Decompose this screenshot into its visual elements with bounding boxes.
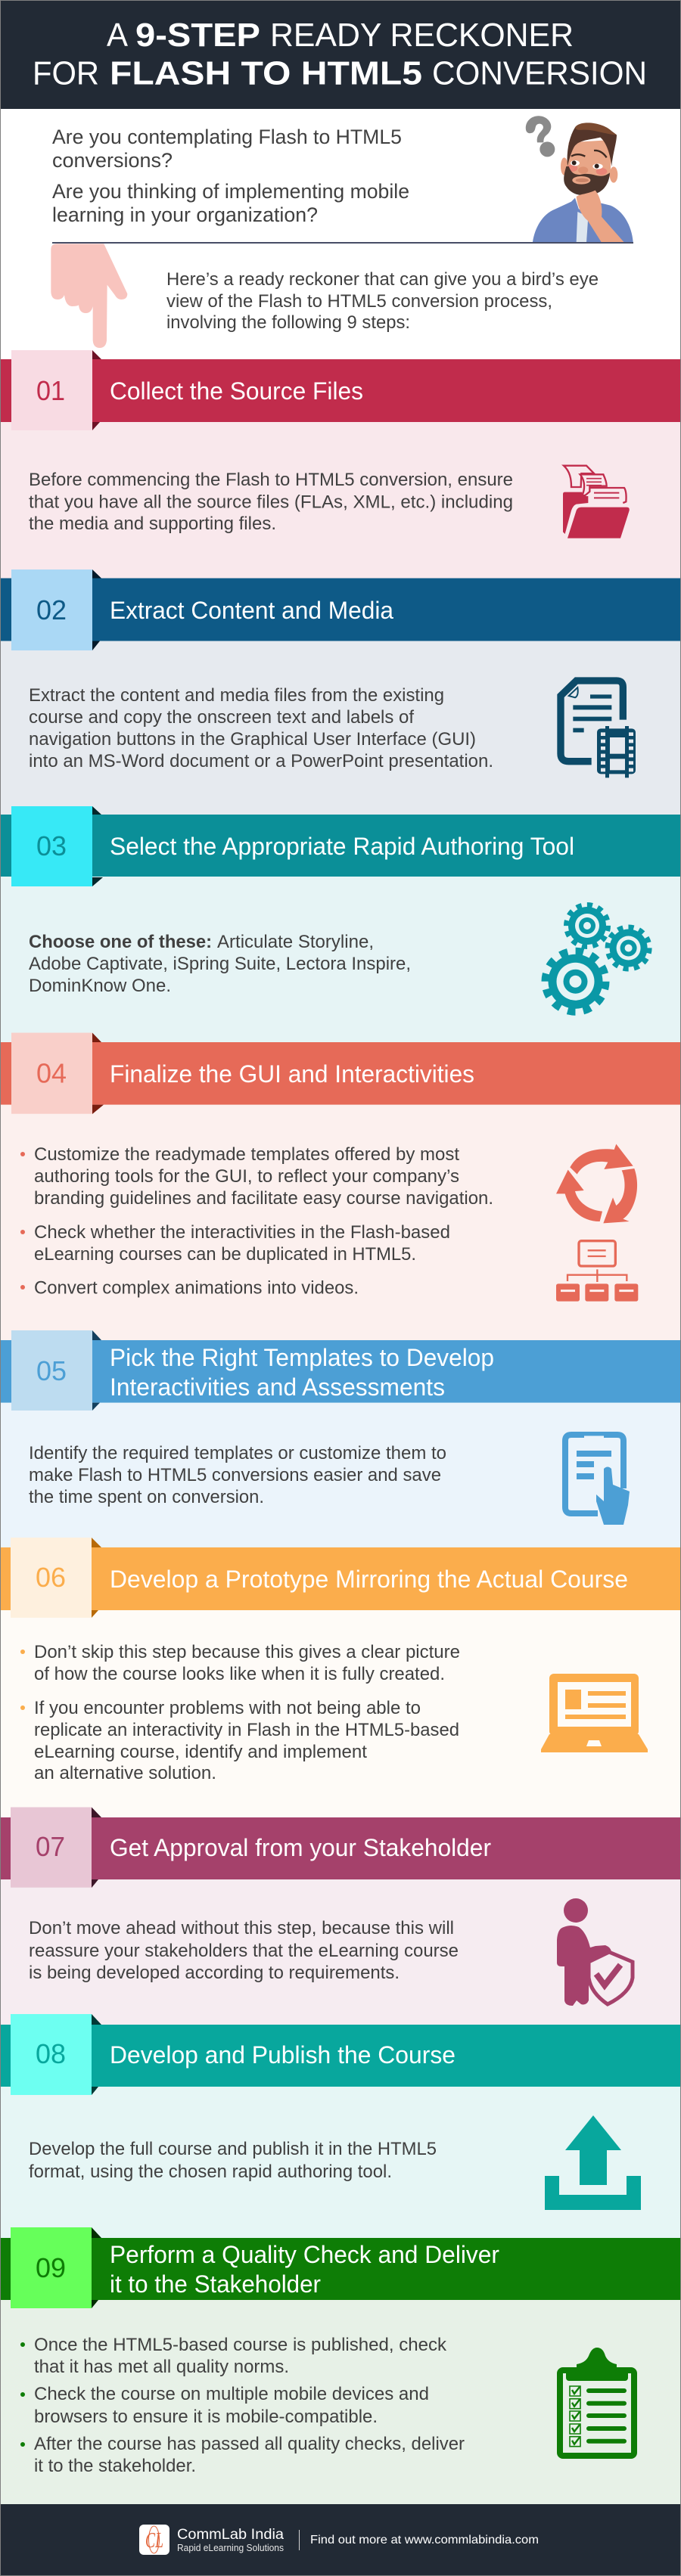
panel: step 06 <box>0 1538 681 1817</box>
icon: clipboard checklist <box>560 2348 634 2456</box>
panel: step 08: 08 <box>36 2038 66 2069</box>
icon: tablet with finger <box>565 1435 630 1525</box>
panel: step 02 <box>0 570 681 815</box>
icon: folder with files <box>563 466 630 538</box>
panel: step 09: it to the Stakeholder <box>110 2270 321 2298</box>
panel: step 03: 03 <box>36 830 67 861</box>
intro lead-in text: view of the Flash to HTML5 conversion process, <box>166 291 552 312</box>
title banner: FLASH TO HTML5 <box>110 55 422 92</box>
panel: step 04: branding guidelines and facilitate easy course navigation. <box>34 1188 493 1209</box>
panel: step 06: an alternative solution. <box>34 1763 216 1783</box>
panel: step 07 <box>0 1808 681 2025</box>
title banner: READY RECKONER <box>270 17 574 54</box>
panel: step 06: replicate an interactivity in Flash in the HTML5-based <box>34 1720 459 1740</box>
panel: step 05: Identify the required templates or customize them to <box>29 1443 446 1463</box>
panel: step 02: Extract the content and media files from the existing <box>29 685 444 706</box>
panel: step 06: Don’t skip this step because this gives a clear picture <box>34 1642 460 1662</box>
panel: step 01: Before commencing the Flash to HTML5 conversion, ensure <box>29 470 513 490</box>
panel: step 07: Get Approval from your Stakeholder <box>110 1834 491 1861</box>
panel: step 04 <box>0 1033 681 1340</box>
panel: step 03: DominKnow One. <box>29 976 171 996</box>
panel: step 06: of how the course looks like when it is fully created. <box>34 1664 445 1684</box>
panel: step 06: 06 <box>36 1562 66 1593</box>
icon: hierarchy chart <box>556 1241 638 1302</box>
panel: step 02: into an MS-Word document or a PowerPoint presentation. <box>29 751 493 771</box>
icon: gears <box>546 905 649 1011</box>
panel: step 02: 02 <box>36 594 67 625</box>
panel: step 05 <box>0 1330 681 1547</box>
panel: step 02: Extract Content and Media <box>110 597 393 624</box>
panel: step 07: is being developed according to requirements. <box>29 1963 400 1983</box>
panel: step 07: Don’t move ahead without this step, because this will <box>29 1918 454 1938</box>
panel: step 08: Develop the full course and publish it in the HTML5 <box>29 2139 437 2159</box>
panel: step 05: Interactivities and Assessments <box>110 1373 445 1401</box>
panel: step 09 <box>0 2227 681 2504</box>
panel: step 02: navigation buttons in the Graphical User Interface (GUI) <box>29 729 476 750</box>
panel: step 09: that it has met all quality norms. <box>34 2357 289 2377</box>
footer: CommLab India <box>177 2527 284 2543</box>
icon: thinking man with question mark <box>526 116 633 243</box>
panel: step 03: Choose one of these: <box>29 932 212 952</box>
panel: step 03: Articulate Storyline, <box>217 932 374 952</box>
icon: person with shield <box>557 1898 633 2006</box>
title banner <box>0 0 681 109</box>
title banner: FOR <box>33 55 99 92</box>
panel: step 09: it to the stakeholder. <box>34 2456 196 2476</box>
title banner: CONVERSION <box>432 55 647 92</box>
icon: document with film strip <box>561 681 636 777</box>
panel: step 04: eLearning courses can be duplicated in HTML5. <box>34 1244 416 1265</box>
panel: step 04: authoring tools for the GUI, to reflect your company’s <box>34 1166 459 1187</box>
panel: step 01 <box>0 350 681 579</box>
divider line <box>52 242 633 244</box>
intro lead-in text <box>166 269 599 333</box>
footer <box>0 2504 681 2576</box>
panel: step 01: Collect the Source Files <box>110 377 363 405</box>
panel: step 08: Develop and Publish the Course <box>110 2041 456 2069</box>
panel: step 09: Check the course on multiple mobile devices and <box>34 2384 429 2404</box>
panel: step 08 <box>0 2014 681 2238</box>
panel: step 01: 01 <box>36 375 65 406</box>
panel: step 06: If you encounter problems with not being able to <box>34 1698 421 1718</box>
title banner: A <box>107 17 129 54</box>
panel: step 02: course and copy the onscreen text and labels of <box>29 707 414 728</box>
panel: step 07: 07 <box>36 1831 65 1862</box>
panel: step 07: reassure your stakeholders that the eLearning course <box>29 1941 459 1961</box>
panel: step 05: 05 <box>36 1355 67 1386</box>
panel: step 04: Convert complex animations into videos. <box>34 1278 359 1298</box>
panel: step 09: 09 <box>36 2252 66 2283</box>
panel: step 03: Adobe Captivate, iSpring Suite, Lectora Inspire, <box>29 954 411 974</box>
intro lead-in text: involving the following 9 steps: <box>166 312 410 333</box>
intro questions <box>52 126 409 226</box>
title banner: 9-STEP <box>135 17 260 54</box>
icon: cycle arrows <box>556 1144 637 1223</box>
panel: step 09: After the course has passed all quality checks, deliver <box>34 2434 465 2454</box>
panel: step 09: Perform a Quality Check and Deliver <box>110 2241 499 2268</box>
icon: laptop <box>541 1674 648 1752</box>
panel: step 09: browsers to ensure it is mobile-compatible. <box>34 2407 378 2427</box>
panel: step 05: Pick the Right Templates to Develop <box>110 1344 494 1371</box>
panel: step 01: the media and supporting files. <box>29 514 276 534</box>
panel: step 08: format, using the chosen rapid authoring tool. <box>29 2162 392 2182</box>
logo badge: CL <box>145 2529 163 2553</box>
icon: pointing hand <box>51 244 127 348</box>
panel: step 04: 04 <box>36 1058 67 1089</box>
footer: Find out more at www.commlabindia.com <box>310 2534 539 2547</box>
logo badge <box>139 2525 169 2555</box>
intro lead-in text: Here’s a ready reckoner that can give you a bird’s eye <box>166 269 599 290</box>
panel: step 05: the time spent on conversion. <box>29 1487 264 1507</box>
panel: step 01: that you have all the source files (FLAs, XML, etc.) including <box>29 492 513 513</box>
intro questions: Are you contemplating Flash to HTML5 <box>52 126 402 148</box>
intro questions: learning in your organization? <box>52 203 318 226</box>
intro questions: conversions? <box>52 149 173 172</box>
panel: step 04: Customize the readymade templates offered by most <box>34 1144 459 1165</box>
panel: step 09: Once the HTML5-based course is published, check <box>34 2335 447 2355</box>
panel: step 03: Select the Appropriate Rapid Authoring Tool <box>110 833 574 860</box>
panel: step 05: make Flash to HTML5 conversions easier and save <box>29 1465 441 1485</box>
panel: step 04: Finalize the GUI and Interactivities <box>110 1060 474 1088</box>
panel: step 03 <box>0 806 681 1042</box>
panel: step 06: Develop a Prototype Mirroring the Actual Course <box>110 1566 628 1593</box>
intro questions: Are you thinking of implementing mobile <box>52 180 409 203</box>
footer: Rapid eLearning Solutions <box>177 2542 284 2553</box>
panel: step 06: eLearning course, identify and implement <box>34 1742 367 1762</box>
panel: step 04: Check whether the interactivities in the Flash-based <box>34 1222 450 1243</box>
icon: upload arrow <box>545 2115 641 2210</box>
